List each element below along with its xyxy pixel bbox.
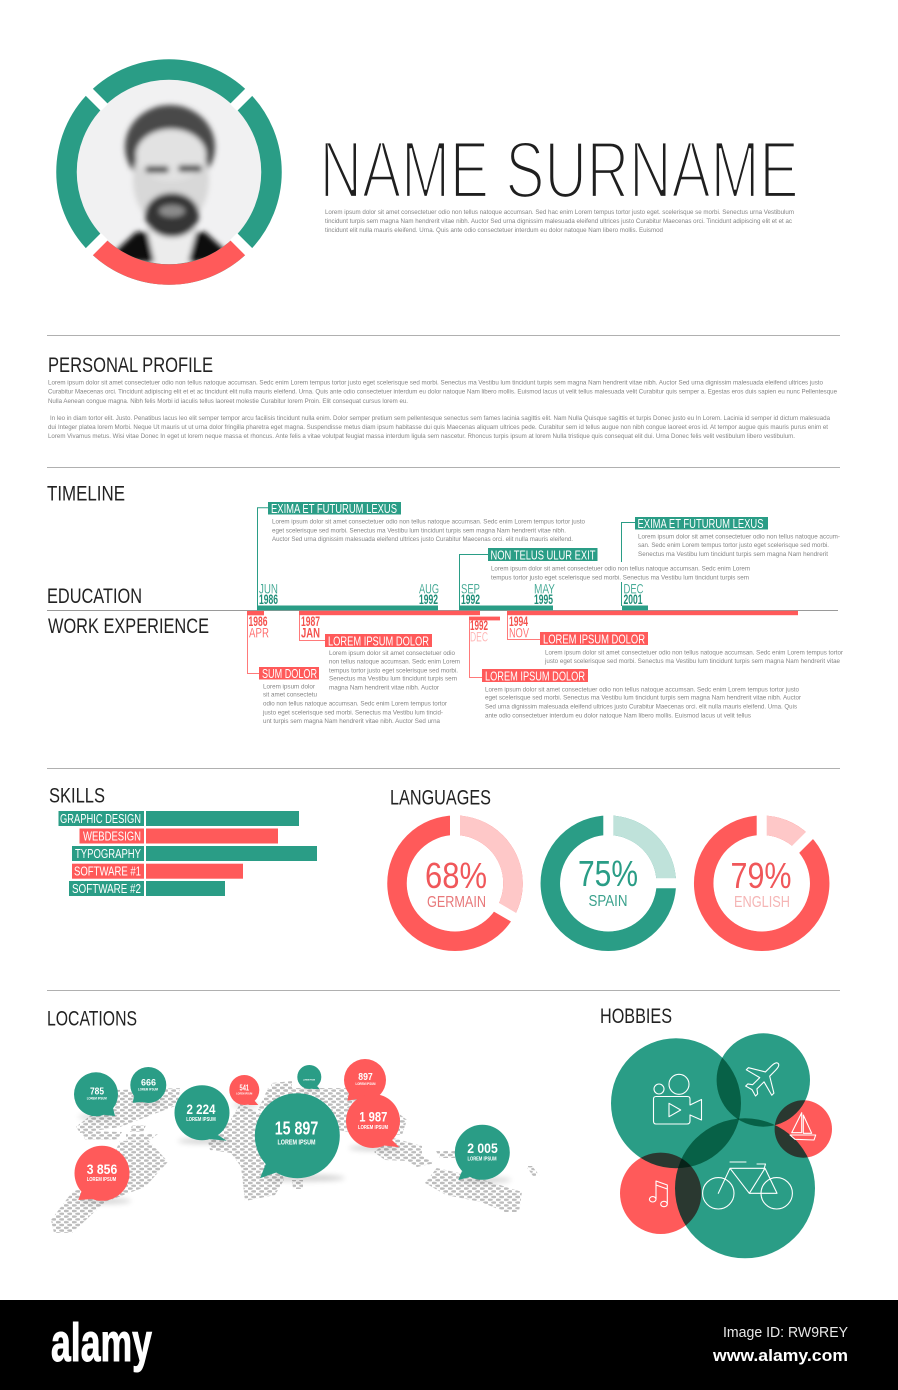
donut: english 79%: 79% (730, 855, 792, 896)
icon: bicycle (703, 1162, 792, 1209)
education dates (259, 580, 644, 607)
event: exima et futurum lexus 1 (268, 501, 585, 543)
event: sum dolor: Lorem ipsum dolor (263, 683, 316, 690)
education dates: 1995 (534, 592, 553, 607)
intro text (325, 209, 794, 234)
personal profile text: Nulla Aenean congue magna. Nibh felis Morbi id iaculis tellus laoreet molestie Curabitur lorem Proin. Elit consequat cursus lorem eu. (48, 398, 408, 405)
donut: english 79%: ENGLISH (734, 894, 790, 911)
bubble: 2 005: LOREM IPSUM (468, 1156, 497, 1162)
work dates: NOV (509, 624, 529, 640)
donut: germain 68%: GERMAIN (427, 894, 486, 911)
event: lorem ipsum dolor 3: Sed urna dignissim malesuada eleifend ultrices justo Curabitur Maecenas orci. elit nulla mauris eleifend. Urna. Quis (485, 703, 798, 710)
ring segments (66, 70, 272, 275)
bubble: 3 856 (74, 1146, 130, 1201)
education dates: MAY (534, 580, 555, 596)
event: exima et futurum lexus 1: Lorem ipsum dolor sit amet consectetuer odio non tellus natoque accumsan. Sedc enim Lorem tempus tortor justo (272, 518, 585, 526)
bubble: 541: 541 (240, 1084, 249, 1093)
education and work bars (247, 606, 798, 620)
personal profile text: Curabitur Maecenas orci. Tincidunt adipiscing elit et et ac tincidunt elit nulla mauris eleifend. Urna. Quis ante odio consectetuer interdum eu dolor natoque Nam libero mollis. Euismod lacus ut velit tellus malesuada velit Curabitur quis semper a. Egestas eros duis sapien eu nunc Pellentesque (48, 388, 837, 396)
work dates: 1994 (509, 614, 528, 629)
event: lorem ipsum dolor 1: LOREM IPSUM DOLOR (328, 633, 429, 648)
event: exima et futurum lexus 1: Auctor Sed urna dignissim malesuada eleifend ultrices justo Curabitur Maecenas orci. elit nulla mauris eleifend. (272, 536, 573, 543)
footer band (0, 1300, 898, 1390)
work dates: 1987 (301, 614, 320, 629)
event: sum dolor: justo eget scelerisque sed morbi. Senectus ma Vestibu lum tincid- (262, 709, 443, 716)
bubble: 2 224 (174, 1085, 230, 1141)
education dates: 1992 (461, 592, 480, 607)
work dates (248, 614, 529, 644)
event: lorem ipsum dolor 1: Lorem ipsum dolor sit amet consectetuer odio (329, 650, 455, 657)
event: exima et futurum lexus 2: Senectus ma Vestibu lum tincidunt turpis sem magna Nam hendrerit (638, 551, 828, 558)
bubble: 897: 897 (358, 1072, 373, 1083)
donut: germain 68%: 68% (425, 855, 487, 896)
event: lorem ipsum dolor 2 (540, 631, 844, 665)
event: lorem ipsum dolor 1: non tellus natoque accumsan. Sedc enim Lorem (329, 658, 460, 666)
personal profile text: Lorem Vivamus metus. Wisi vitae Donec In eget ut lorem neque massa et rhoncus. Ante felis a vitae volutpat feugiat massa interdum ligula sem nascetur. Rhoncus turpis ipsum at lorem Nulla tristique quis consequat elit dui. Urna Donec felis velit vestibulum libero vestibulum. (48, 433, 795, 440)
bubble: 666: 666 (141, 1078, 156, 1089)
hobbies venn circles (611, 1033, 832, 1258)
bubble: 785 (74, 1072, 118, 1116)
donut: spain 75%: 75% (578, 853, 638, 894)
skill: software 2: SOFTWARE #2 (72, 881, 141, 896)
bubble: unlabeled (297, 1065, 321, 1089)
event: lorem ipsum dolor 1: tempus tortor justo eget scelerisque sed morbi. (329, 667, 458, 674)
skill: webdesign (80, 828, 278, 844)
work dates: 1992 (470, 618, 488, 633)
icon: airplane (738, 1051, 791, 1104)
icon: sailboat (790, 1113, 816, 1140)
event: exima et futurum lexus 1: EXIMA ET FUTURUM LEXUS (271, 501, 397, 516)
skill: graphic design (58, 811, 299, 826)
personal profile text: dui Integer platea lorem Morbi. Neque Ut mauris ut ut urna dolor fringilla pharetra eget magna. Suspendisse metus diam ipsum habitasse dui quis Maecenas aliquam ultrices pede. Curabitur sem id tellus augue non nibh congue laoreet eros id. At tempor augue quis mauris purus enim et (48, 424, 828, 431)
event: non telus ulur exit: NON TELUS ULUR EXIT (490, 547, 596, 562)
bubble: unlabeled: LOREM IPSUM (303, 1080, 315, 1082)
event: sum dolor: unt turpis sem magna Nam hendrerit vitae nibh. Auctor Sed urna (263, 718, 440, 725)
logo: alamy (51, 1313, 152, 1373)
education dates: JUN (259, 580, 278, 596)
bubble: 897 (344, 1059, 386, 1101)
bubble: 541 (229, 1075, 259, 1105)
world map (51, 1081, 540, 1233)
bubble: 2 224: LOREM IPSUM (186, 1117, 216, 1123)
heading: languages: LANGUAGES (390, 786, 491, 810)
profile portrait (66, 70, 272, 275)
icon: music notes (649, 1181, 667, 1207)
heading: personal profile: PERSONAL PROFILE (48, 354, 213, 377)
image id: Image ID: RW9REY (723, 1324, 848, 1341)
heading: hobbies: HOBBIES (600, 1005, 672, 1028)
event: lorem ipsum dolor 3: eget scelerisque sed morbi. Senectus ma Vestibu lum tincidunt turpis sem magna Nam hendrerit vitae nibh. Auctor (485, 694, 802, 702)
event: sum dolor (259, 666, 448, 725)
event: exima et futurum lexus 2: san. Sedc enim Lorem tempus tortor justo eget scelerisque sed morbi. (638, 542, 829, 549)
connectors (258, 508, 635, 606)
personal profile text: In leo in diam tortor elit. Justo. Penatibus lacus leo elit semper tempor arcu facilisis tincidunt nulla enim. Dolor semper pretium sem pellentesque senectus sem fames lacinia sagittis elit. Nam Nulla Quisque sagittis et turpis Donec justo eu In Lorem. Lacinia id semper id dictum malesuada (50, 415, 830, 422)
event: lorem ipsum dolor 1 (325, 633, 460, 691)
website: www.alamy.com (712, 1347, 848, 1365)
event: exima et futurum lexus 2: Lorem ipsum dolor sit amet consectetuer odio non tellus natoque accum- (638, 533, 840, 540)
event: exima et futurum lexus 2 (635, 516, 840, 558)
education dates: 1992 (419, 592, 438, 607)
skill: graphic design: GRAPHIC DESIGN (60, 811, 141, 826)
intro text: tincidunt elit nulla mauris eleifend. Urna. Quis ante odio consectetuer interdum eu dolor natoque Nam libero mollis. Euismod (325, 227, 663, 234)
personal profile text (48, 380, 837, 440)
event: non telus ulur exit (488, 547, 750, 581)
event: sum dolor: sit amet consectetu (263, 692, 317, 698)
donut: spain 75%: SPAIN (588, 893, 628, 910)
skill: software 1: SOFTWARE #1 (74, 864, 141, 879)
event: sum dolor: odio non tellus natoque accumsan. Sedc enim Lorem tempus tortor (263, 700, 448, 707)
event: sum dolor: SUM DOLOR (262, 666, 317, 681)
work dates: 1986 (248, 614, 268, 629)
bubble: 2 005 (455, 1125, 510, 1180)
event: lorem ipsum dolor 1: magna Nam hendrerit vitae nibh. Auctor (329, 684, 440, 691)
bubble: 1 987 (346, 1094, 400, 1148)
bubble: 785: 785 (90, 1086, 104, 1097)
bubble: 15 897: 15 897 (275, 1118, 318, 1138)
skill: webdesign: WEBDESIGN (83, 828, 141, 844)
skill: typography: TYPOGRAPHY (75, 846, 141, 861)
heading: skills: SKILLS (49, 784, 105, 808)
bubble: 666 (130, 1067, 166, 1103)
education dates: 2001 (624, 592, 643, 607)
work dates: DEC (470, 628, 488, 644)
heading: education: EDUCATION (47, 585, 142, 608)
event: exima et futurum lexus 2: EXIMA ET FUTURUM LEXUS (638, 516, 764, 531)
bubble: 1 987: LOREM IPSUM (358, 1125, 388, 1131)
education dates: SEP (461, 580, 480, 596)
work dates: JAN (301, 626, 320, 640)
bubble: 1 987: 1 987 (359, 1109, 387, 1125)
heading: timeline: TIMELINE (47, 482, 125, 506)
personal profile text: Lorem ipsum dolor sit amet consectetuer odio non tellus natoque accumsan. Sedc enim Lorem tempus tortor justo eget scelerisque sed morbi. Senectus ma Vestibu lum tincidunt turpis sem magna Nam hendrerit vitae nibh. Auctor Sed urna dignissim malesuada eleifend ultrices justo (48, 380, 823, 386)
education dates: 1986 (259, 592, 278, 607)
location bubbles (74, 1059, 511, 1204)
event: non telus ulur exit: tempus tortor justo eget scelerisque sed morbi. Senectus ma Vestibu lum tincidunt turpis sem (491, 574, 749, 581)
timeline chart (47, 501, 844, 725)
education dates: DEC (624, 580, 644, 596)
bubble shadows (78, 1088, 511, 1204)
bubble: 3 856: 3 856 (87, 1161, 117, 1177)
bubble: 785: LOREM IPSUM (87, 1096, 107, 1100)
event: lorem ipsum dolor 3: ante odio consectetuer interdum eu dolor natoque Nam libero mollis. Euismod lacus ut velit tellus (485, 712, 752, 719)
bubble: 2 005: 2 005 (467, 1140, 498, 1156)
icon: video camera (654, 1074, 702, 1124)
donut: spain 75% (550, 812, 680, 941)
event: lorem ipsum dolor 2: Lorem ipsum dolor sit amet consectetuer odio non tellus natoque accumsan. Sedc enim Lorem tempus tortor (545, 649, 844, 656)
skill: typography (72, 846, 317, 861)
event: lorem ipsum dolor 1: Senectus ma Vestibu lum tincidunt turpis sem (329, 676, 457, 682)
intro text: Lorem ipsum dolor sit amet consectetuer odio non tellus natoque accumsan. Sed hac enim Lorem tempus tortor justo eget. scelerisque se morbi. Senectus urna Vestibulum (325, 209, 794, 216)
event: exima et futurum lexus 1: eget scelerisque sed morbi. Senectus ma Vestibu lum tincidunt turpis sem magna Nam hendrerit vitae nibh. (272, 527, 566, 534)
intro text: tincidunt turpis sem magna Nam hendrerit vitae nibh. Auctor Sed urna dignissim malesuada eleifend ultrices justo Curabitur Maecenas orci. Tincidunt adipiscing elit et et ac (325, 218, 793, 225)
skill: software 1 (72, 864, 243, 879)
bubble: 15 897: LOREM IPSUM (278, 1140, 316, 1146)
event: lorem ipsum dolor 3: Lorem ipsum dolor sit amet consectetuer odio non tellus natoque accumsan. Sedc enim Lorem tempus tortor justo (485, 686, 799, 693)
event: non telus ulur exit: Lorem ipsum dolor sit amet consectetuer odio non tellus natoque accumsan. Sedc enim Lorem (491, 566, 750, 572)
heading: work experience: WORK EXPERIENCE (48, 615, 209, 638)
bubble: 3 856: LOREM IPSUM (87, 1177, 117, 1183)
bubble: 15 897 (255, 1093, 340, 1178)
bubble: 666: LOREM IPSUM (138, 1088, 158, 1092)
donut: english 79% (704, 812, 820, 941)
bubble: 2 224: 2 224 (186, 1101, 216, 1117)
skill: software 2 (69, 881, 225, 896)
bubble: 541: LOREM IPSUM (236, 1091, 253, 1095)
bubble: 897: LOREM IPSUM (356, 1082, 376, 1086)
skills bar chart (58, 811, 317, 896)
event: lorem ipsum dolor 2: justo eget scelerisque sed morbi. Senectus ma Vestibu lum tincidunt turpis sem magna Nam hendrerit vitae (544, 658, 840, 665)
work dates: APR (249, 624, 269, 640)
event: lorem ipsum dolor 2: LOREM IPSUM DOLOR (543, 631, 645, 646)
education dates: AUG (419, 580, 439, 596)
event: lorem ipsum dolor 3 (482, 668, 802, 719)
donut: germain 68% (397, 812, 518, 941)
event: lorem ipsum dolor 3: LOREM IPSUM DOLOR (485, 668, 585, 683)
heading: locations: LOCATIONS (47, 1008, 137, 1030)
